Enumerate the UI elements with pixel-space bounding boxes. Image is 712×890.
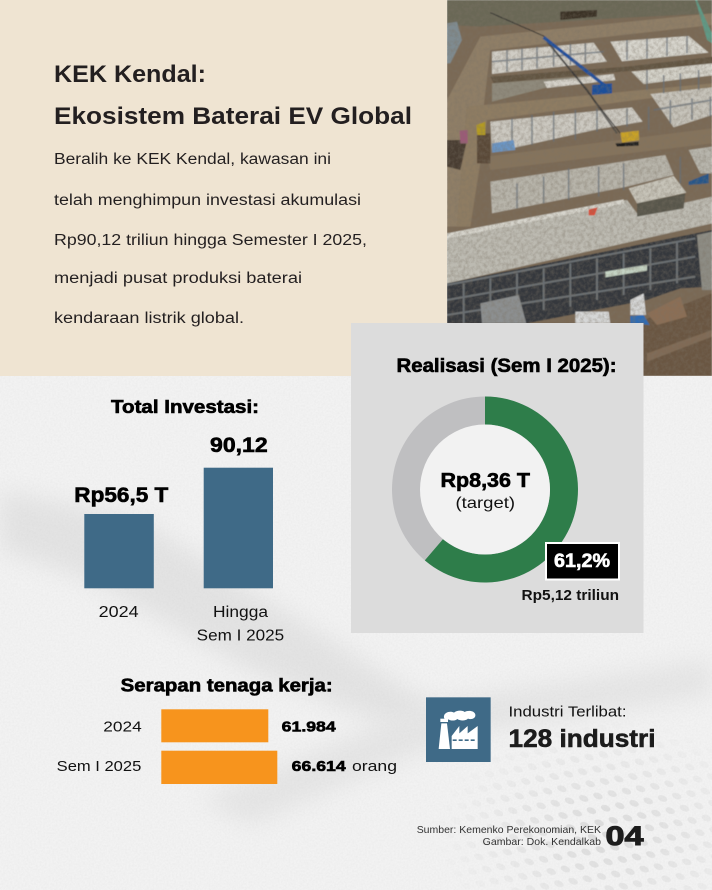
bar hingga sem I 2025: 90,12 bbox=[210, 434, 268, 457]
bar 2024 bbox=[74, 484, 168, 621]
donut centre caption: (target) bbox=[456, 495, 515, 512]
intro text block: telah menghimpun investasi akumulasi bbox=[54, 192, 361, 209]
beige header panel bbox=[0, 0, 447, 376]
bar hingga sem I 2025: Hingga bbox=[213, 604, 268, 621]
industri stat bbox=[508, 704, 656, 753]
bar hingga sem I 2025: Sem I 2025 bbox=[197, 628, 284, 644]
source credits bbox=[417, 824, 601, 848]
title: KEK Kendal: bbox=[54, 61, 206, 88]
textured background bbox=[0, 490, 712, 890]
donut centre value: Rp8,36 T bbox=[440, 470, 530, 492]
bar row sem I 2025: 66.614 bbox=[292, 758, 346, 775]
source credits: Gambar: Dok. Kendalkab bbox=[483, 836, 601, 848]
lower right ground bbox=[644, 293, 712, 376]
bar hingga sem I 2025 bbox=[197, 434, 284, 644]
heading: realisasi: Realisasi (Sem I 2025): bbox=[396, 356, 616, 377]
icon: factory bbox=[426, 697, 491, 762]
bar row sem I 2025 bbox=[57, 751, 397, 784]
panel: realisasi bbox=[351, 323, 644, 633]
bar chart: total investasi bbox=[74, 397, 284, 644]
title: Ekosistem Baterai EV Global bbox=[54, 103, 412, 130]
bar row sem I 2025: Sem I 2025 bbox=[57, 758, 141, 775]
intro text block: Beralih ke KEK Kendal, kawasan ini bbox=[54, 151, 331, 168]
bar row 2024: 2024 bbox=[103, 718, 142, 736]
bar row 2024 bbox=[103, 709, 336, 742]
page number: 04 bbox=[606, 821, 644, 851]
percentage badge: 61,2% bbox=[554, 551, 610, 572]
bar chart: serapan tenaga kerja bbox=[57, 676, 397, 784]
bar 2024: Rp56,5 T bbox=[74, 484, 168, 507]
heading: serapan tenaga kerja: Serapan tenaga kerja: bbox=[121, 676, 333, 696]
slabs bbox=[492, 43, 607, 74]
cranes bbox=[490, 13, 620, 133]
bar row sem I 2025: orang bbox=[352, 758, 397, 775]
frames bbox=[492, 36, 712, 208]
building face bbox=[447, 230, 712, 323]
industri stat: 128 industri bbox=[508, 725, 656, 753]
intro text block: menjadi pusat produksi baterai bbox=[54, 270, 302, 287]
construction site photo bbox=[447, 0, 712, 376]
heading: total investasi: Total Investasi: bbox=[111, 397, 259, 417]
intro text block bbox=[54, 151, 367, 327]
realised value: Rp5,12 triliun bbox=[522, 588, 619, 604]
title bbox=[54, 61, 412, 130]
intro text block: kendaraan listrik global. bbox=[54, 310, 244, 327]
percentage badge bbox=[546, 543, 619, 580]
bar row 2024: 61.984 bbox=[282, 718, 336, 736]
donut chart bbox=[392, 396, 578, 582]
industri stat: Industri Terlibat: bbox=[508, 704, 626, 720]
bar 2024: 2024 bbox=[99, 604, 139, 621]
intro text block: Rp90,12 triliun hingga Semester I 2025, bbox=[54, 232, 367, 249]
source credits: Sumber: Kemenko Perekonomian, KEK bbox=[417, 824, 601, 836]
